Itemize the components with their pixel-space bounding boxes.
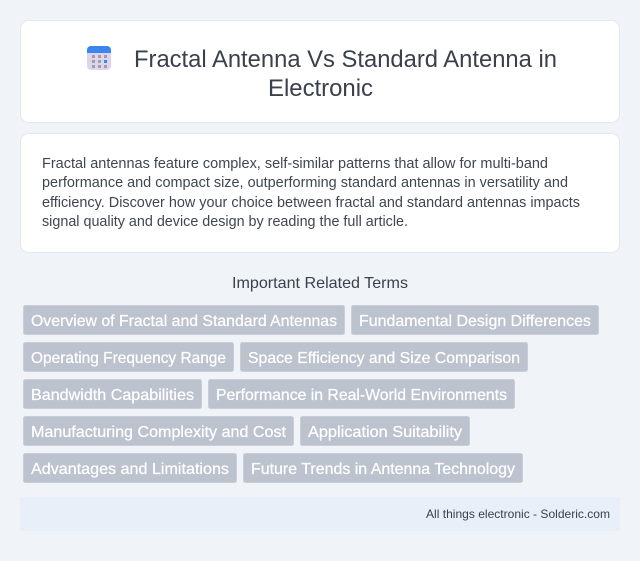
- heading: related terms: Important Related Terms: [232, 275, 408, 292]
- text block: description: signal quality and device design by reading the full article.: [42, 214, 408, 230]
- tag: [24, 416, 294, 446]
- tag: Fundamental Design Differences: [359, 313, 591, 330]
- text block: description: [42, 156, 580, 230]
- text block: description: efficiency. Discover how your choice between fractal and standard antennas impacts: [42, 195, 580, 211]
- tag: [24, 380, 202, 408]
- tag: [352, 306, 598, 334]
- tag: Performance in Real-World Environments: [216, 387, 507, 404]
- icon: calendar: [87, 46, 111, 70]
- tag: Advantages and Limitations: [31, 461, 229, 478]
- tag list: [24, 306, 598, 482]
- tag: Application Suitability: [308, 424, 462, 441]
- title: [134, 46, 557, 102]
- tag: Bandwidth Capabilities: [31, 387, 194, 404]
- tag: Space Efficiency and Size Comparison: [248, 350, 520, 367]
- tag: Future Trends in Antenna Technology: [251, 461, 515, 478]
- tag: [24, 454, 236, 482]
- tag: Overview of Fractal and Standard Antennas: [31, 313, 337, 330]
- text block: description: performance and compact size, outperforming standard antennas in versatility and: [42, 175, 568, 191]
- tag: [240, 342, 528, 372]
- title: Electronic: [268, 75, 373, 102]
- tag: [24, 306, 344, 334]
- tag: Manufacturing Complexity and Cost: [31, 424, 287, 441]
- tag: [24, 342, 234, 372]
- tag: [244, 454, 522, 482]
- tag: [300, 416, 470, 446]
- footer: [20, 497, 620, 531]
- title: Fractal Antenna Vs Standard Antenna in: [134, 46, 557, 73]
- tag: Operating Frequency Range: [31, 350, 226, 367]
- footer: All things electronic - Solderic.com: [426, 507, 610, 521]
- panel: title card: [20, 20, 620, 122]
- panel: description: [20, 134, 620, 252]
- text block: description: Fractal antennas feature complex, self-similar patterns that allow for multi-band: [42, 156, 548, 172]
- tag: [208, 380, 514, 408]
